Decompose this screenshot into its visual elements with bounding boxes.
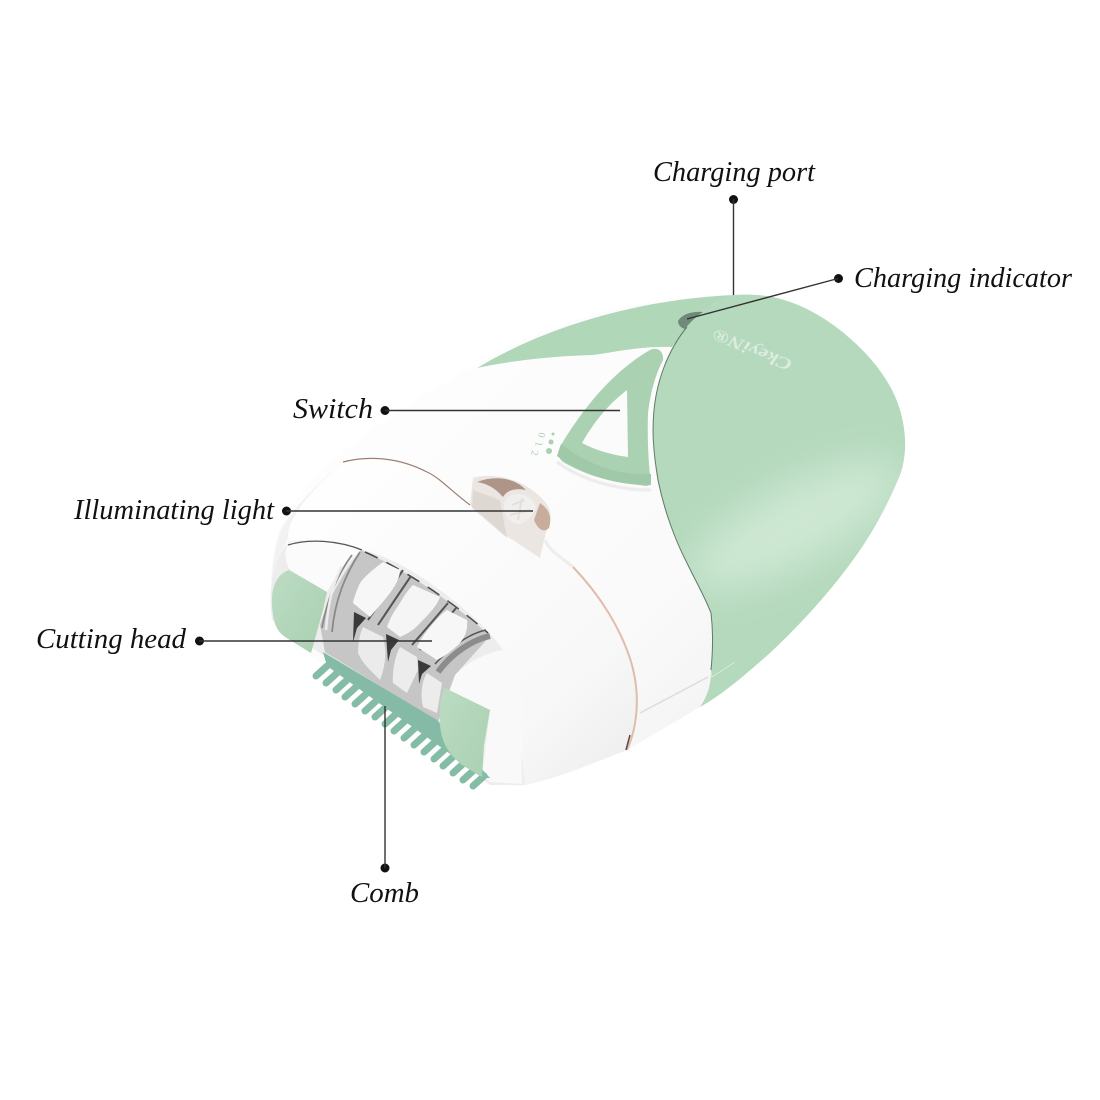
callout: Cutting head: Cutting head [36,623,186,655]
left green pad [272,570,327,653]
speed marks: 2 [528,449,540,456]
switch white slider window [582,390,628,457]
gold seam front [573,567,637,750]
switch green frame [559,349,663,486]
comb base [323,652,490,778]
comb [316,652,490,786]
shadow under cap [365,552,488,633]
illuminating light [470,476,551,558]
green upper shell [477,295,773,368]
green rear shell [653,295,905,707]
switch lower lip [557,444,651,485]
shell edge line [653,327,712,670]
cap lower shade [545,540,573,567]
lens housing [470,476,551,558]
white body silhouette [271,295,760,786]
callout: Charging indicator: Charging indicator [854,262,1073,294]
right green pad [440,688,490,777]
metal disc area [320,550,490,722]
white blocks upper [353,562,400,617]
switch soft shadow [557,462,651,490]
left rim shading [272,462,343,592]
callout: Comb: Comb [350,877,419,909]
dark accents [353,612,366,642]
callout: Charging indicator [687,262,1073,319]
opening rim [288,541,362,550]
infographic: epilator parts diagram [38,161,1072,902]
callout: Charging port: Charging port [653,156,816,188]
right disc ring [438,636,490,672]
speed marks: 0 [535,431,547,438]
cutting head rollers [320,550,490,722]
roller side right [445,650,522,784]
callout: Comb [350,706,419,909]
shell highlights [688,452,900,598]
speed marks [528,431,554,456]
left disc rings [322,552,360,632]
brand text on shell: CkeyiN® [709,324,795,375]
callout: Charging port [653,156,816,295]
callout: Switch: Switch [293,393,373,425]
device: epilator [271,295,920,786]
head opening [271,541,525,785]
callout: Cutting head [36,623,432,655]
white blocks lower [358,627,385,680]
lower seam [640,677,708,713]
callout: Illuminating light [73,494,533,526]
switch [557,349,663,490]
charging port recess [678,312,703,329]
roller side left [286,541,361,592]
speed marks: 1 [532,440,544,447]
callout: Illuminating light: Illuminating light [73,494,275,526]
callout: Switch [293,393,620,425]
gold seam top [343,458,470,505]
front head cap [288,458,637,785]
dark disc gaps [368,570,411,625]
